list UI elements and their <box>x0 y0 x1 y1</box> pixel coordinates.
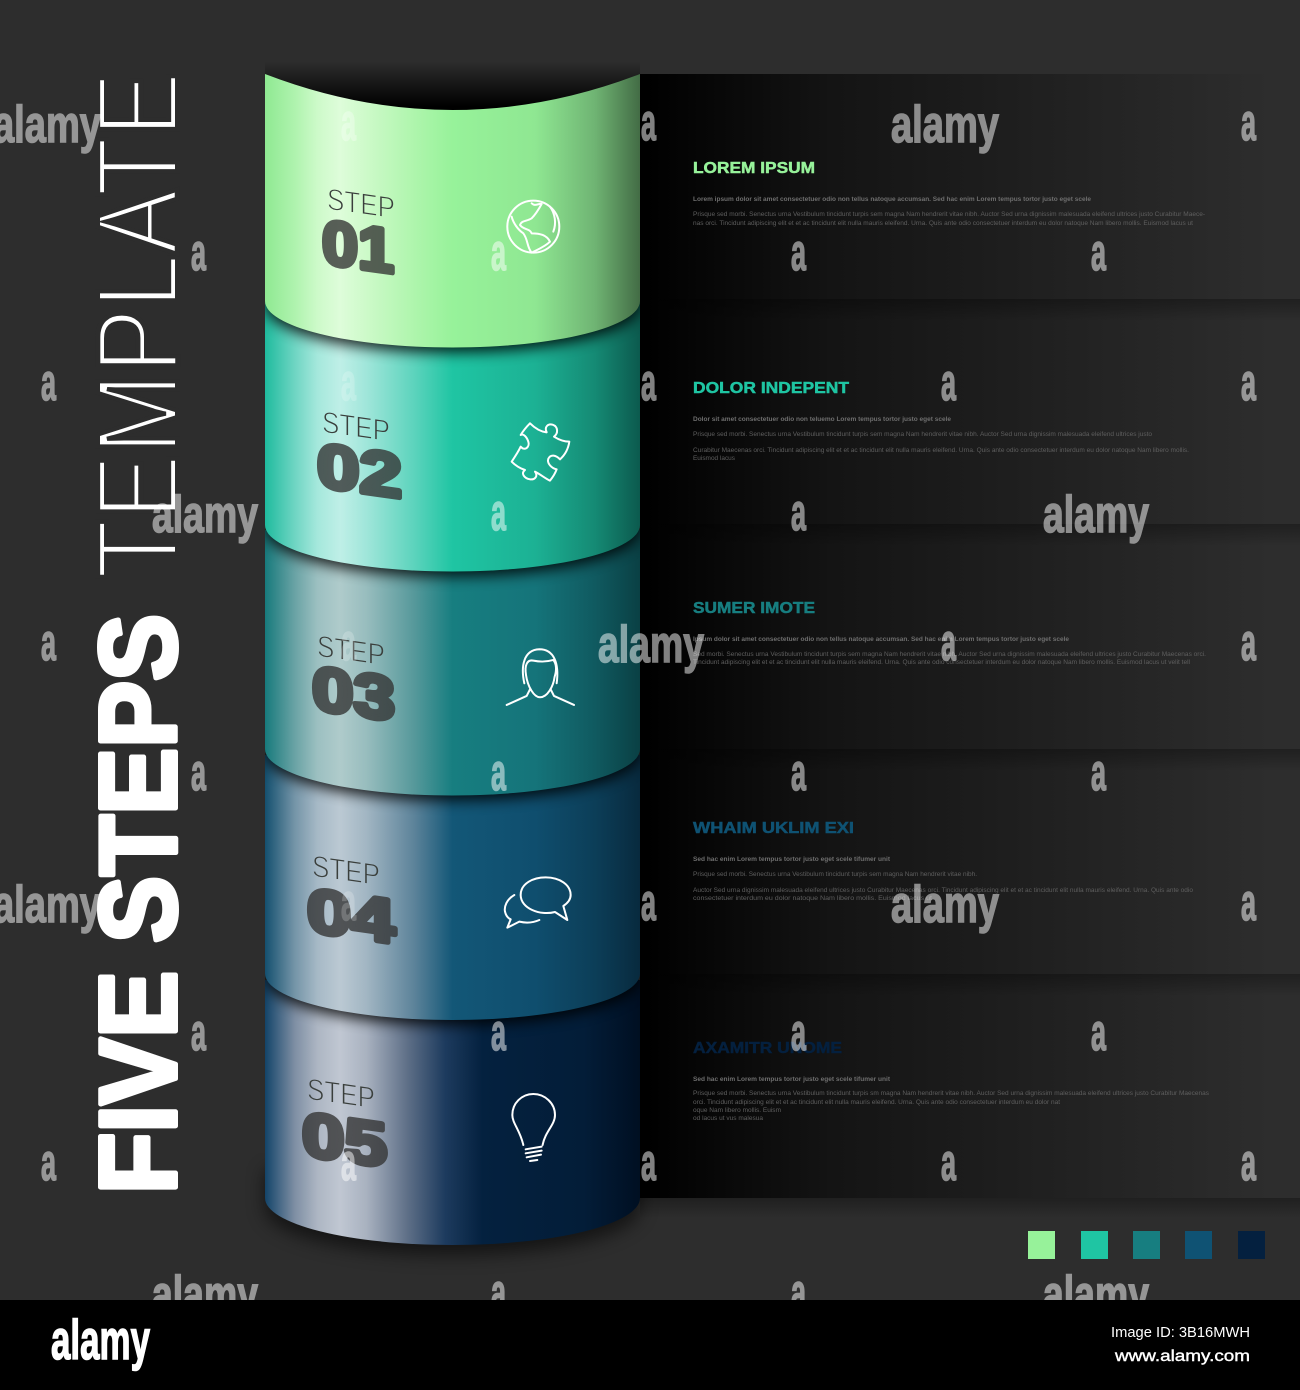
panel 5 body: od lacus ut vus malesua <box>693 1116 764 1122</box>
watermark pattern: a <box>1241 874 1257 932</box>
watermark pattern: a <box>41 1134 57 1192</box>
shadow of step 4 <box>265 976 640 1034</box>
step 5 label: STEP <box>307 1073 375 1116</box>
step 2 label <box>317 406 402 512</box>
watermark pattern: a <box>941 1134 957 1192</box>
panel 4 body: Sed hac enim Lorem tempus tortor justo eget scele tifumer unit <box>693 857 890 863</box>
watermark pattern: a <box>1091 1004 1107 1062</box>
watermark pattern: a <box>791 224 807 282</box>
footer logo: alamy <box>51 1308 150 1371</box>
panel 1 body: Lorem ipsum dolor sit amet consectetuer odio non tellus natoque accumsan. Sed hac enim Lorem tempus tortor justo eget scele <box>693 197 1092 203</box>
panel 1 body <box>693 197 1205 227</box>
panel 1 body: Prisque sed morbi. Senectus urna Vestibulum tincidunt turpis sem magna Nam hendrerit vitae nibh. Auctor Sed urna dignissim malesuada eleifend ultrices justo Curabitur Maece- <box>693 212 1205 218</box>
shadow of step 2 <box>265 527 640 586</box>
panel 4 heading: WHAIM UKLIM EXI <box>693 820 854 837</box>
panel 4 body: Prisque sed morbi. Senectus urna Vestibulum tincidunt turpis sem magna Nam hendrerit vitae nibh. <box>693 872 977 878</box>
panel 5 body: Sed hac enim Lorem tempus tortor justo eget scele tifumer unit <box>693 1077 890 1083</box>
watermark pattern: a <box>641 1134 657 1192</box>
watermark pattern: a <box>341 94 357 152</box>
watermark pattern: a <box>341 1134 357 1192</box>
panel 3 heading: SUMER IMOTE <box>693 600 815 617</box>
watermark pattern: a <box>791 1264 807 1322</box>
panel 2 body: Curabitur Maecenas orci. Tincidunt adipiscing elit et et ac tincidunt elit nulla mauris eleifend. Urna. Quis ante odio consectetuer interdum eu dolor natoque Nam libero mollis. <box>693 448 1189 454</box>
panel 5 body: oque Nam libero mollis. Euism <box>693 1108 781 1114</box>
panel 4 <box>640 749 1300 974</box>
panel 2 heading: DOLOR INDEPENT <box>693 380 849 397</box>
panel 1 <box>640 74 1300 299</box>
panel 5 body <box>693 1077 1209 1122</box>
step 2 label: STEP <box>322 406 390 449</box>
icon: globe <box>507 201 559 253</box>
cylinder: step 2 <box>265 300 640 572</box>
panel 2 body <box>693 417 1189 462</box>
watermark pattern: alamy <box>1043 1266 1149 1324</box>
panel 4 body: consectetuer interdum eu dolor natoque Nam libero mollis. Euismod lacus ut <box>693 896 932 902</box>
step 5 label: 05 <box>302 1100 387 1181</box>
step 1 label: STEP <box>327 183 395 226</box>
step 4 label: STEP <box>312 850 380 893</box>
watermark pattern: a <box>41 614 57 672</box>
watermark pattern: a <box>491 1004 507 1062</box>
watermark pattern: a <box>1091 744 1107 802</box>
panel 3 body <box>693 637 1206 666</box>
watermark pattern: a <box>1241 614 1257 672</box>
watermark pattern: a <box>491 1264 507 1322</box>
cylinder: step 1 <box>265 74 640 348</box>
watermark pattern: a <box>791 744 807 802</box>
watermark pattern: alamy <box>152 486 258 544</box>
panel 2 body: Euismod lacus <box>693 456 735 462</box>
step 1 label: 01 <box>322 208 394 287</box>
panel 2 <box>640 299 1300 524</box>
footer url: www.alamy.com <box>1114 1348 1250 1365</box>
watermark pattern: a <box>791 484 807 542</box>
watermark pattern: alamy <box>891 876 999 934</box>
panel 5 body: Prisque sed morbi. Senectus urna Vestibulum tincidunt turpis sm magna Nam hendrerit vitae nibh. Auctor Sed urna dignissim malesuada eleifend ultrices justo Curabitur Maecenas <box>693 1091 1209 1097</box>
panel 2 body: Dolor sit amet consectetuer odio non teluemo Lorem tempus tortor justo eget scele <box>693 417 952 423</box>
footer image id: Image ID: 3B16MWH <box>1111 1324 1250 1341</box>
panel 3 body: Sed morbi. Senectus urna Vestibulum tincidunt turpis sem magna Nam hendrerit vitae nibh. Auctor Sed urna dignissim malesuada eleifend ultrices justo Curabitur Maecenas orci. <box>693 652 1206 658</box>
watermark pattern: alamy <box>152 1266 258 1324</box>
step 2 label: 02 <box>317 431 402 512</box>
bottom drop shadow <box>265 1170 640 1255</box>
panel 1 body: nas orci. Tincidunt adipiscing elit et et ac tincidunt elit nulla mauris eleifend. Urna. Quis ante odio consectetuer interdum eu dolor natoque Nam libero mollis. Euismod lacus ut <box>693 221 1193 227</box>
watermark pattern: a <box>191 744 207 802</box>
watermark pattern: a <box>1241 94 1257 152</box>
watermark pattern: a <box>1241 354 1257 412</box>
watermark pattern: a <box>941 354 957 412</box>
watermark pattern: a <box>941 614 957 672</box>
top shadow of cylinder <box>265 62 640 112</box>
title: five steps: FIVE STEPS <box>78 614 200 1194</box>
step 3 label <box>312 630 395 735</box>
watermark pattern: a <box>1241 1134 1257 1192</box>
panel 3 body: Ipsum dolor sit amet consectetuer odio non tellus natoque accumsan. Sed hac enim Lorem tempus tortor justo eget scele <box>693 637 1070 643</box>
shadow of step 3 <box>265 751 640 810</box>
watermark pattern: alamy <box>598 616 704 674</box>
panel 3 body: Tincidunt adipiscing elit et et ac tincidunt elit nulla mauris eleifend. Urna. Quis ante odio consectetuer interdum eu dolor natoque Nam libero mollis. Euismod lacus ut velit tell <box>693 660 1190 666</box>
panel 4 body <box>693 857 1194 902</box>
watermark pattern: a <box>641 874 657 932</box>
cylinder: step 5 <box>265 980 640 1245</box>
color swatches <box>1028 1231 1265 1259</box>
icon: light bulb <box>512 1094 555 1161</box>
step 3 label: 03 <box>312 654 395 735</box>
footer bar <box>0 1300 1300 1390</box>
panel 5 body: orci. Tincidunt adipiscing elit et et ac tincidunt elit nulla mauris eleifend. Urna. Quis ante odio consectetuer interdum eu dolor nat <box>693 1100 1060 1106</box>
watermark pattern: a <box>491 744 507 802</box>
icon: speech bubbles <box>505 877 571 928</box>
panel: right text area <box>640 74 1300 1198</box>
watermark pattern: alamy <box>891 96 999 154</box>
step 3 label: STEP <box>317 630 385 673</box>
watermark pattern: a <box>641 94 657 152</box>
watermark pattern: a <box>491 224 507 282</box>
watermark pattern: a <box>191 224 207 282</box>
panel 3 <box>640 524 1300 749</box>
watermark pattern: a <box>341 874 357 932</box>
watermark pattern: a <box>791 1004 807 1062</box>
panel 4 body: Auctor Sed urna dignissim malesuada eleifend ultrices justo Curabitur Maecenas orci. Tincidunt adipiscing elit et et ac tincidunt elit nulla mauris eleifend. Urna. Quis ante odio <box>693 888 1194 894</box>
step 4 label: 04 <box>307 876 395 957</box>
step 4 label <box>307 850 395 957</box>
step 5 label <box>302 1073 387 1181</box>
watermark pattern: a <box>41 354 57 412</box>
panel 5 heading: AXAMITR UNOME <box>693 1040 842 1057</box>
panel 1 heading: LOREM IPSUM <box>693 160 815 177</box>
watermark pattern: a <box>1091 224 1107 282</box>
watermark pattern: alamy <box>1043 486 1149 544</box>
cylinder: step 4 <box>265 755 640 1020</box>
icon: puzzle piece <box>512 423 569 481</box>
watermark pattern: a <box>341 354 357 412</box>
shadow of step 1 <box>265 302 640 364</box>
watermark pattern: a <box>491 484 507 542</box>
panel 2 body: Prisque sed morbi. Senectus urna Vestibulum tincidunt turpis sem magna Nam hendrerit vitae nibh. Auctor Sed urna dignissim malesuada eleifend ultrices justo <box>693 432 1153 438</box>
cylinder: step 3 <box>265 530 640 796</box>
icon: person head <box>507 649 574 705</box>
panel 5 <box>640 974 1300 1198</box>
watermark pattern: a <box>341 614 357 672</box>
watermark pattern: a <box>641 354 657 412</box>
watermark pattern: a <box>191 1004 207 1062</box>
